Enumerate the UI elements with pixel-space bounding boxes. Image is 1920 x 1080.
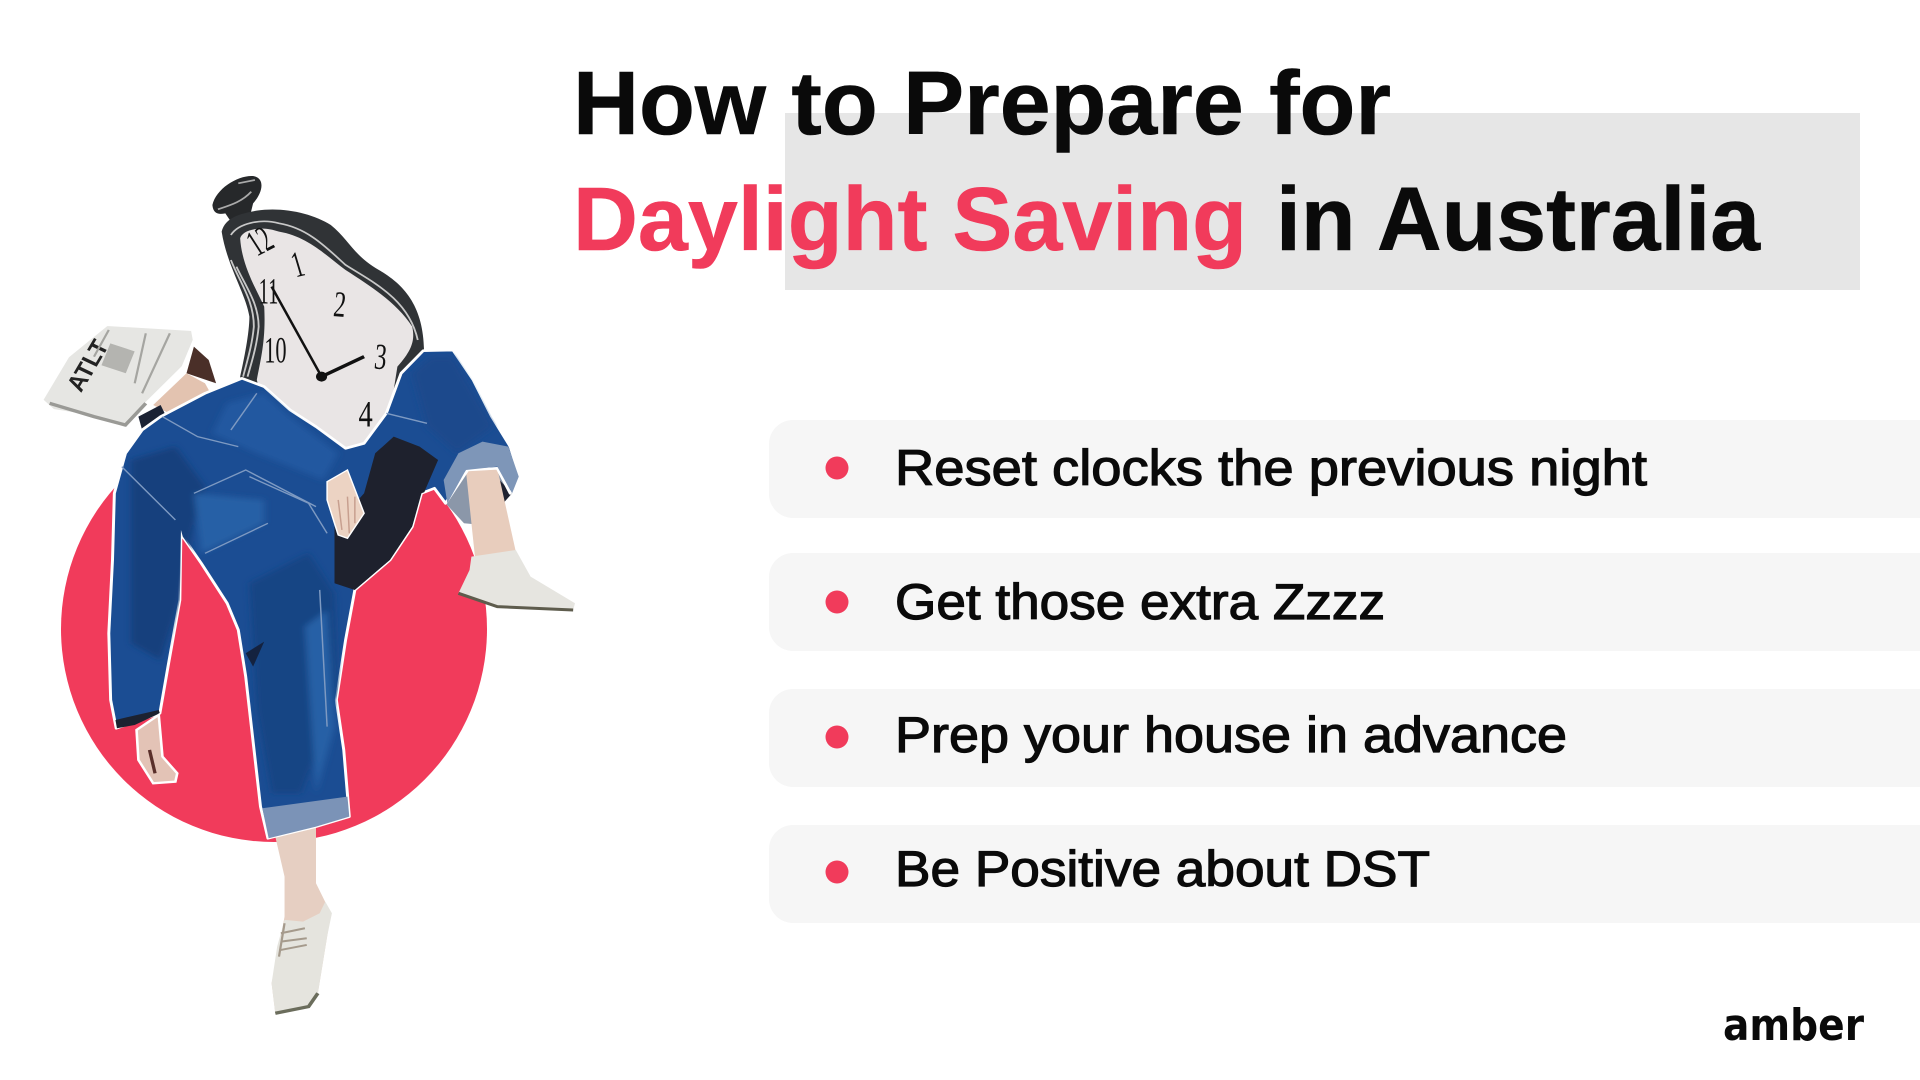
illustration: figure with melting clock [42, 176, 575, 1013]
icon: melting clock: 3 [373, 335, 389, 377]
icon: melting clock: 10 [264, 330, 287, 371]
tip 1: reset clocks [769, 420, 1920, 518]
title: in Australia [1276, 170, 1761, 270]
tip 3: prep house [769, 689, 1920, 787]
icon: melting clock: 2 [332, 283, 348, 325]
denim outfit [109, 350, 520, 838]
tip 4: be positive: Be Positive about DST [895, 841, 1430, 897]
panel: preparation tips list [769, 420, 1920, 923]
tip 2: extra sleep [769, 553, 1920, 651]
tip 1: reset clocks: Reset clocks the previous night [895, 440, 1647, 496]
icon: melting clock: 4 [359, 395, 373, 436]
title backdrop: grey rectangle [785, 113, 1860, 290]
icon: melting clock: 1 [286, 243, 309, 285]
tip 3: prep house: Prep your house in advance [895, 707, 1567, 763]
logo: amber: amber [1723, 1000, 1864, 1051]
title: Daylight Saving [573, 170, 1247, 270]
tip 2: extra sleep: Get those extra Zzzz [895, 574, 1385, 630]
icon: newspaper [42, 325, 194, 428]
hands [137, 470, 364, 783]
red circle behind figure [61, 416, 487, 842]
icon: newspaper: ATLT [62, 336, 115, 396]
icon: melting clock: 12 [239, 219, 281, 264]
tip 4: be positive [769, 825, 1920, 923]
lower calf and shoe [272, 827, 332, 1013]
title: How to Prepare for [573, 54, 1391, 154]
icon: melting clock: 11 [259, 272, 278, 312]
neck and hair [138, 347, 216, 430]
icon: melting clock [212, 176, 424, 460]
raised shin and shoe [446, 468, 575, 610]
title [573, 54, 1761, 270]
